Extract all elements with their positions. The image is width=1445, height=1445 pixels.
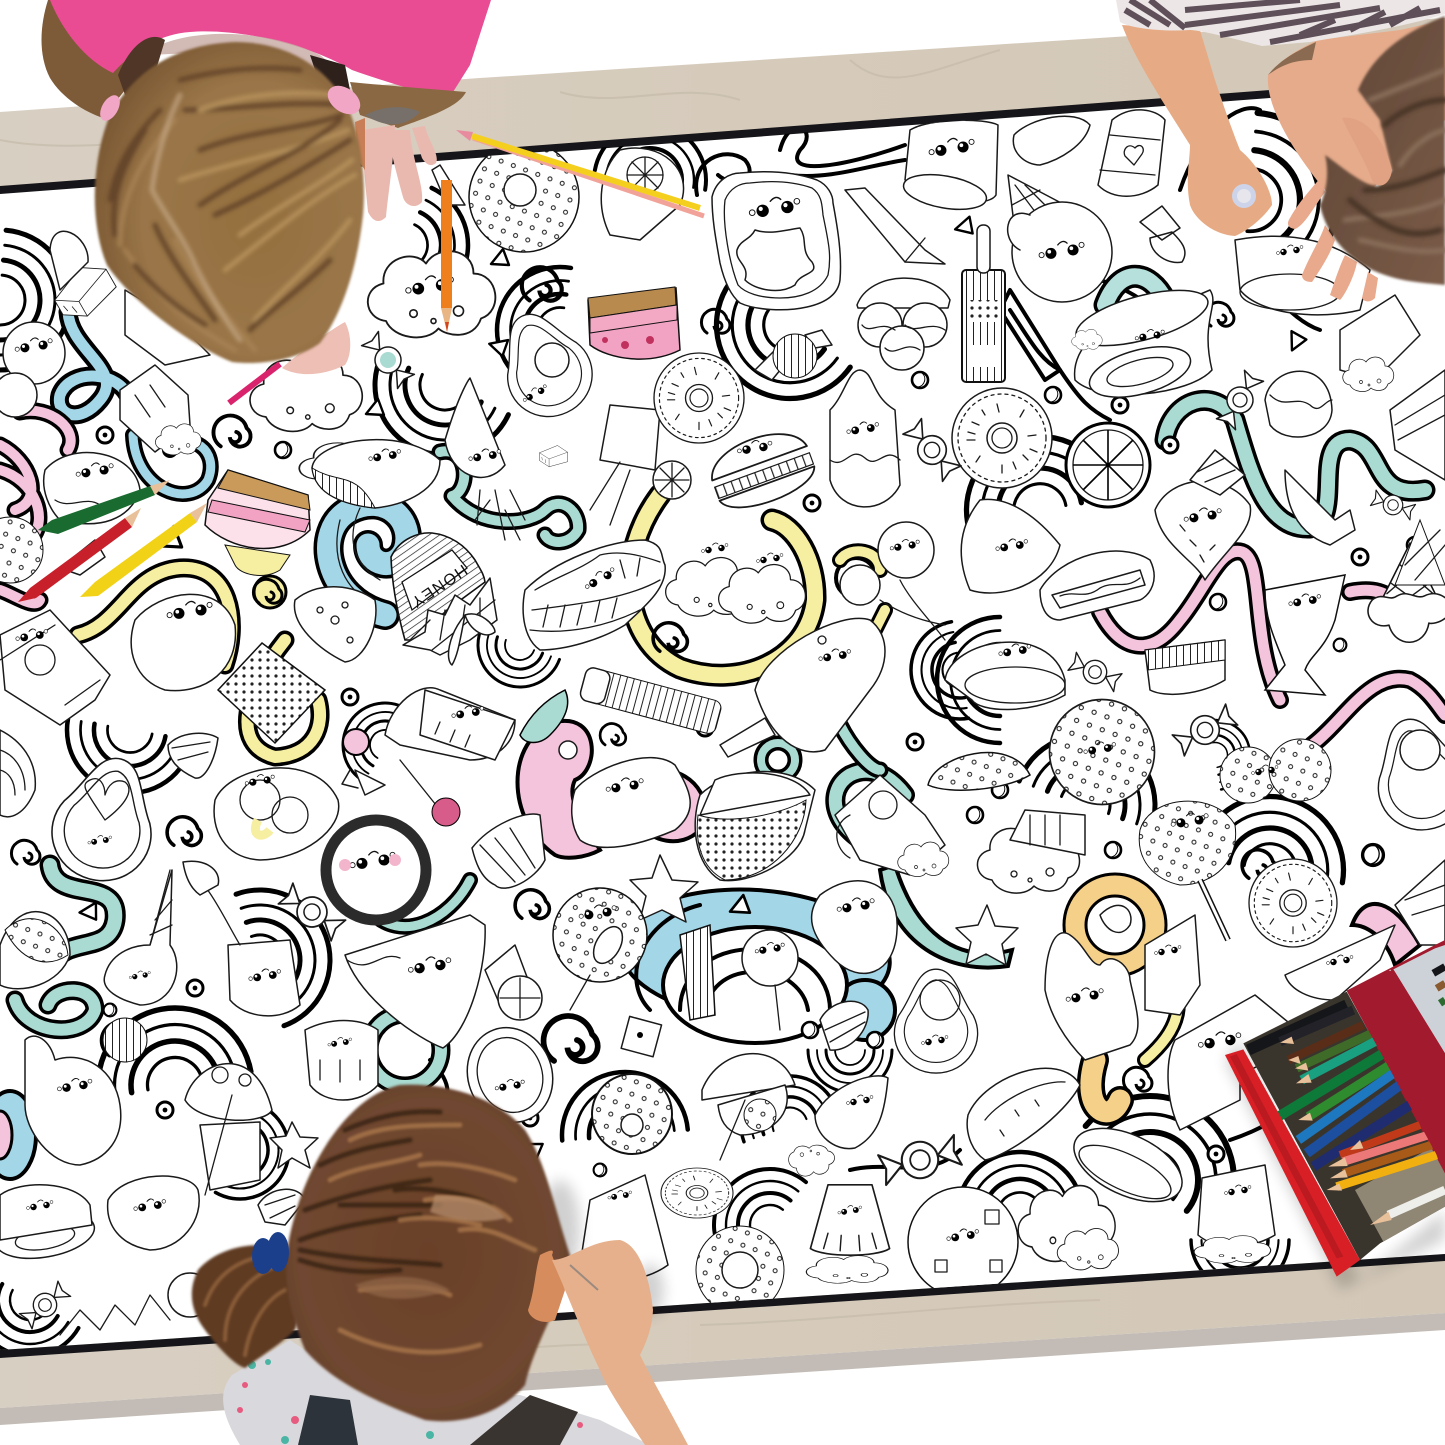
hair strands (110, 68, 355, 350)
child: top left with pink shirt (42, 0, 491, 374)
lid panel (1347, 940, 1445, 1173)
hair tie (252, 1232, 289, 1274)
marker (1232, 184, 1256, 208)
shirt flowers (248, 1359, 434, 1444)
honey label: HONEY (407, 561, 470, 611)
parting (152, 95, 240, 340)
left pigtail (42, 0, 150, 118)
child: top right with striped shirt (1116, 0, 1445, 301)
food: upper middle row (654, 236, 1445, 620)
ear (528, 1250, 565, 1322)
head hair (1320, 16, 1445, 285)
hair tie: left (96, 92, 124, 124)
pencil: pink in girl's hand (229, 364, 280, 403)
right pigtail (350, 82, 466, 128)
hair tie: right (322, 80, 366, 120)
box interior (1243, 992, 1445, 1260)
honey jar (391, 533, 497, 665)
doodle: small rings, spirals and triangles (11, 215, 1423, 1176)
food: center cluster (299, 440, 1065, 881)
child: bottom with ponytail (192, 1085, 688, 1445)
red front flap (1225, 1049, 1360, 1277)
lower hand (282, 322, 350, 374)
ear (1342, 118, 1392, 185)
colour ribbon: yellow and orange shapes (78, 495, 1178, 1112)
shirt (223, 1340, 650, 1445)
ponytail (192, 1245, 300, 1368)
food: left lower (0, 861, 378, 1335)
colour ribbon: teal shapes (15, 400, 1425, 1086)
pencil: orange (441, 180, 452, 332)
arm (1122, 25, 1272, 236)
hair strands: dark (300, 1112, 490, 1272)
pencil box (1225, 940, 1445, 1277)
hair strands: light (330, 1125, 535, 1352)
arm and hand (552, 1240, 688, 1445)
pencils: green, red and yellow on poster (18, 480, 207, 602)
colour ribbon: pink shapes (0, 411, 1445, 965)
neck and face (1268, 20, 1445, 210)
shirt (1116, 0, 1445, 46)
shirt (50, 0, 491, 100)
pencil tips (1260, 1037, 1392, 1225)
food: top row (0, 110, 1185, 540)
collar shadow (150, 34, 345, 88)
fingers (355, 118, 437, 221)
hair (95, 42, 364, 363)
food: camera cup, clock and lower center (326, 775, 978, 1134)
food: bottom row (580, 1054, 1275, 1314)
head hair (286, 1085, 570, 1421)
overall straps (298, 1395, 358, 1445)
sheet shadows under children (540, 1040, 1445, 1316)
fingers (1288, 178, 1378, 301)
pancake stack (523, 540, 665, 650)
pencil: yellow and pink pencils on poster (456, 130, 704, 216)
food: left middle (0, 453, 460, 892)
colour ribbon: blue shapes (0, 276, 1165, 1179)
food: right middle (877, 520, 1445, 1188)
pencils in box (1248, 967, 1445, 1215)
